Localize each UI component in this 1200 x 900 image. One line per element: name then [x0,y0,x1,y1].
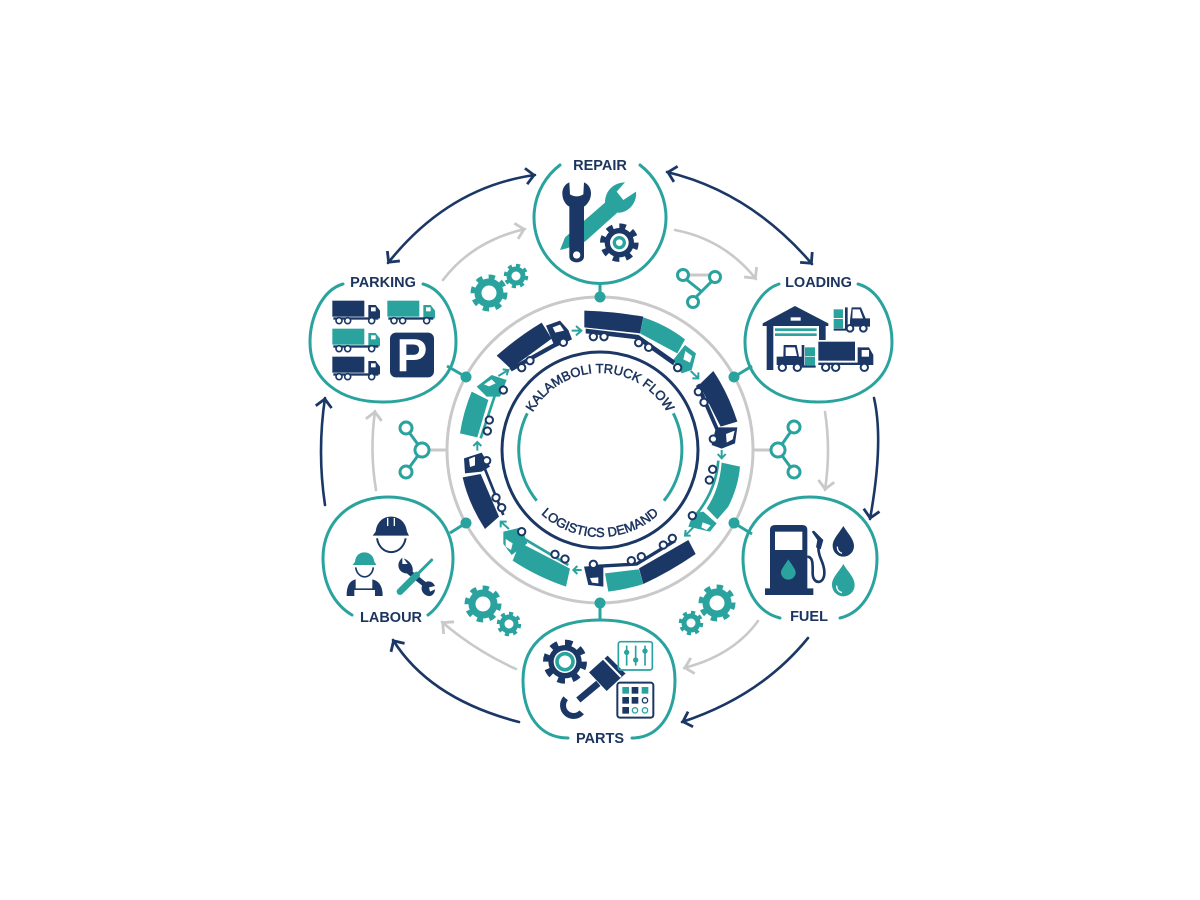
curved heading: Logistics Demand: LOGISTICS DEMAND [542,508,658,538]
outer navy arrow labour-parking [321,398,325,505]
panel: labour [323,497,453,626]
icon: network left [400,422,447,478]
navy inner ring [502,352,698,548]
heading: parking: PARKING [350,275,416,291]
loading outline [745,284,892,402]
gray arrow labour-parking [372,411,376,490]
icon: gear, piston and control panels [547,642,653,718]
truck 5: navy and teal bottom [584,535,696,592]
gray arrow parts-labour [442,622,516,669]
icon: wrenches and gear [560,182,636,262]
labour outline [323,497,453,615]
connector: repair to ring [594,283,606,302]
central gray ring [447,297,753,603]
panel: loading [745,275,892,402]
teal inner arc left [519,413,537,501]
heading: repair: REPAIR [573,158,627,174]
heading: labour: LABOUR [360,610,423,626]
gray arrow loading-fuel [825,412,828,490]
connector: labour to ring [450,518,472,533]
outer navy arrow parts-labour [393,640,519,722]
panel: parts [523,620,675,747]
panel: fuel [743,497,877,625]
connector: parking to ring [447,366,472,382]
panel: repair [534,158,666,283]
panel: parking [310,275,456,402]
gray arrow repair-loading [675,230,756,279]
truck 1: navy top-left [497,321,572,371]
connector: loading to ring [728,366,752,382]
icon: fuel pump and drops [765,525,855,596]
heading: parts: PARTS [576,731,624,747]
icon: parked trucks and P sign: P [397,330,427,382]
connector: fuel to ring [728,518,752,534]
outer navy arrow fuel-parts [682,638,808,722]
icon: workers and tools [347,517,435,596]
icon: gears bottom-right [680,587,733,634]
repair outline [534,165,666,283]
outer navy arrow repair-loading [667,172,812,264]
heading: loading: LOADING [785,275,852,291]
icon: gears top-left [473,266,526,309]
connector: parts to ring [594,598,606,620]
truck 2: navy and teal top [584,311,696,373]
truck 8: teal left upper [460,375,507,438]
truck ring [460,311,740,592]
teal inner arc right [664,413,682,501]
icon: network right [753,421,800,478]
fuel outline [743,497,877,618]
parking outline [310,284,456,402]
icon: gears bottom-left [467,588,520,634]
icon: parked trucks and P sign [332,301,435,382]
gray arrow fuel-parts [684,621,758,668]
icon: network top-right [678,270,720,308]
outer navy arrow loading-fuel [870,398,878,519]
truck 4: teal right lower [688,461,740,532]
outer navy arrow repair-parking [388,175,535,263]
icon: warehouse, forklifts and truck [763,306,873,371]
truck 3: navy right upper [695,371,737,449]
heading: fuel: FUEL [790,609,828,625]
flow arrows between trucks [473,326,726,574]
curved heading: Kalamboli Truck Flow: KALAMBOLI TRUCK FLOW [525,364,676,412]
parts outline [523,620,675,738]
gray arrow parking-repair [443,229,525,280]
truck 6: teal bottom-left [503,527,570,587]
truck 7: navy left lower [463,453,505,529]
